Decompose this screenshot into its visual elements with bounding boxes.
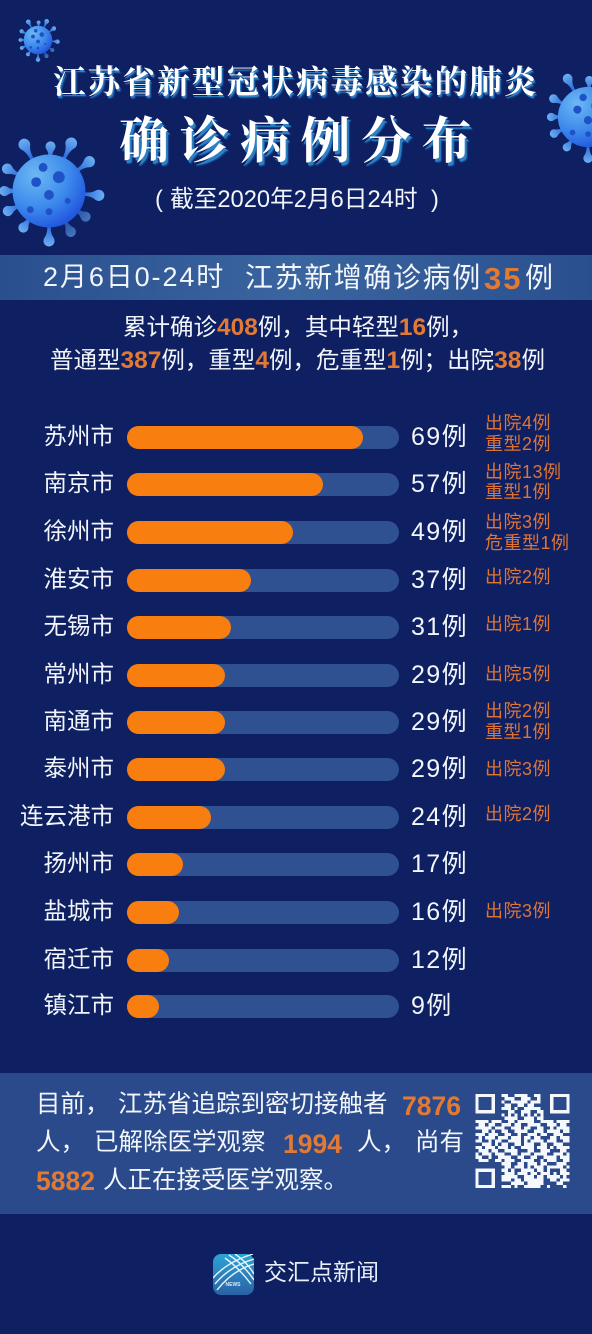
bar row: 常州市: 常州市 [44,661,114,687]
title: line 1: 江苏省新型冠状病毒感染的肺炎 [53,65,539,101]
bar row: 淮安市: 出院2例 [485,567,551,587]
contacts text line 2 end: 人， [357,1129,406,1156]
contacts text line 1: 目前， [36,1091,110,1118]
bar row: 扬州市: 扬州市 [44,850,114,876]
cumulative summary line 2: 普通型387例，重型4例，危重型1例；出院38例 [50,347,545,374]
bar row: 无锡市: 出院1例 [485,614,551,634]
bar row: 盐城市: 出院3例 [485,901,551,921]
icon: large virus left [0,138,104,246]
bar row: 徐州市: 徐州市 [44,518,114,544]
contacts text line 2 continued: 已解除医学观察 [94,1129,266,1156]
bar row: 连云港市 [20,803,551,831]
bar row: 泰州市 [44,755,551,783]
text: 出院4例 [485,413,551,433]
subtitle: date: ) [431,187,439,213]
daily time range: 2月6日0-24时 [43,262,225,292]
bar row: 常州市: 29例 [411,661,468,689]
bar row: 徐州市: 危重型1例 [485,533,570,553]
bar row: 宿迁市: 12例 [411,946,468,974]
contacts text line 3: 人正在接受医学观察。 [103,1167,348,1194]
observed number 5882: 5882 [36,1166,95,1196]
bar row: 镇江市 [44,992,453,1020]
daily new cases number: 35 [484,261,522,296]
bar row: 连云港市: 出院2例 [485,804,551,824]
contacts text line 2 last: 尚有 [415,1129,464,1156]
bar row: 淮安市 [44,566,551,594]
bar row: 南通市 [44,701,551,742]
bar row: 徐州市 [44,512,570,553]
bar row: 徐州市: 出院3例 [485,512,551,532]
bar row: 南京市: 重型1例 [485,482,551,502]
title: line 2: 确诊病例分布 [119,113,482,169]
subtitle: date: ( [155,187,163,213]
bar row: 南京市 [44,462,562,502]
panel: close contacts band [0,1073,592,1214]
bar row: 南通市: 出院2例 [485,701,551,721]
subtitle: date: 截至2020年2月6日24时 [170,187,418,213]
bar row: 南通市: 南通市 [44,708,114,734]
logo: 交汇点新闻 icon: NEWS [226,1282,241,1288]
bar row: 苏州市: 苏州市 [44,423,114,449]
bar row: 泰州市: 出院3例 [485,759,551,779]
logo: 交汇点新闻 icon [213,1254,254,1295]
bar row: 宿迁市 [44,946,468,974]
bar row: 南通市: 重型1例 [485,722,551,742]
bar row: 淮安市: 37例 [411,566,468,594]
bar row: 泰州市: 泰州市 [44,755,114,781]
icon: small virus top left [18,19,60,62]
bar row: 常州市 [44,661,551,689]
bar row: 徐州市: 49例 [411,518,468,546]
bar row: 苏州市: 重型2例 [485,434,551,454]
contacts text line 1 continued: 江苏省追踪到密切接触者 [118,1091,388,1118]
bar row: 宿迁市: 宿迁市 [44,946,114,972]
bar row: 淮安市: 淮安市 [44,566,114,592]
bar row: 南京市: 南京市 [44,470,114,496]
text: 出院13例 [485,462,562,482]
contacts text line 2: 人， [36,1129,85,1156]
bar row: 苏州市: 69例 [411,423,468,451]
QR code [476,1094,570,1188]
bar row: 镇江市: 镇江市 [44,992,114,1018]
bar row: 盐城市 [44,898,551,926]
bar row: 无锡市: 31例 [411,613,468,641]
cumulative summary line 1: 累计确诊408例，其中轻型16例， [123,314,473,341]
bar row: 泰州市: 29例 [411,755,468,783]
bar row: 无锡市: 无锡市 [44,613,114,639]
bar row: 镇江市: 9例 [411,992,453,1020]
bar row: 无锡市 [44,613,551,641]
bar row: 扬州市: 17例 [411,850,468,878]
bar row: 苏州市 [44,413,551,454]
daily new cases text: 江苏新增确诊病例 [245,262,482,293]
panel: daily new cases band [0,255,592,300]
bar row: 南通市: 29例 [411,708,468,736]
bar row: 扬州市 [44,850,468,878]
logo: brand name: 交汇点新闻 [264,1259,379,1285]
icon: virus right edge [547,74,592,163]
bar row: 常州市: 出院5例 [485,664,551,684]
released number 1994: 1994 [283,1129,342,1159]
bar row: 盐城市: 16例 [411,898,468,926]
bar row: 南京市: 57例 [411,470,468,498]
bar row: 连云港市: 连云港市 [20,803,114,829]
bar row: 连云港市: 24例 [411,803,468,831]
bar row: 盐城市: 盐城市 [44,898,114,924]
daily new cases unit: 例 [525,262,553,293]
contacts number 7876: 7876 [402,1091,461,1121]
